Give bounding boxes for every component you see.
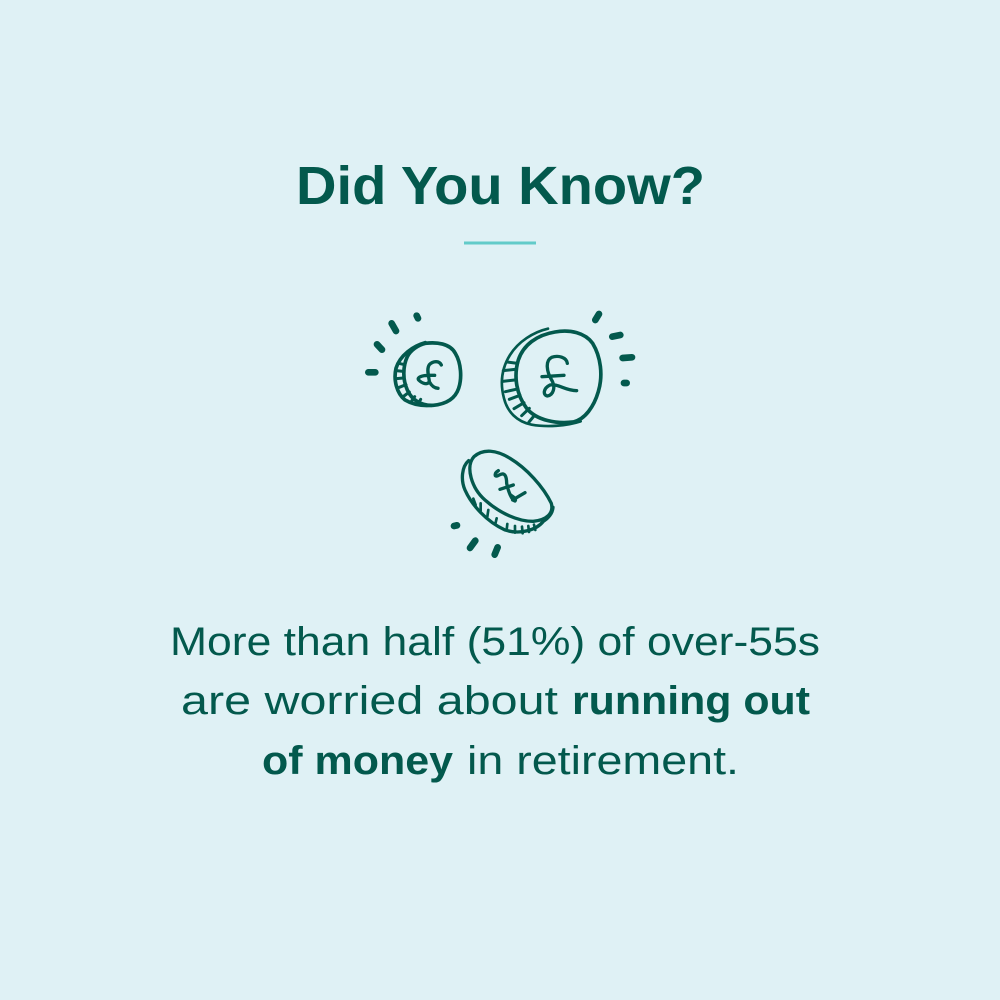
icon: large coin bbox=[502, 329, 601, 426]
title: Did You Know? bbox=[296, 156, 705, 216]
icon: small coin bbox=[395, 343, 461, 406]
icon: three pound coins bbox=[368, 314, 632, 555]
line 3 bold: of money bbox=[262, 739, 454, 783]
line 2 bold: running out bbox=[572, 679, 810, 723]
line 3 regular: in retirement. bbox=[467, 739, 739, 783]
sparks: small coin bbox=[368, 316, 418, 372]
line 2 regular: are worried about bbox=[181, 679, 558, 723]
line 1: More than half (51%) of over-55s bbox=[170, 620, 820, 664]
icon: tilted coin bbox=[462, 451, 553, 533]
sparks: tilted coin bbox=[454, 525, 498, 555]
teal divider bbox=[464, 242, 536, 244]
sparks: large coin bbox=[595, 314, 632, 383]
body text bbox=[170, 620, 820, 783]
